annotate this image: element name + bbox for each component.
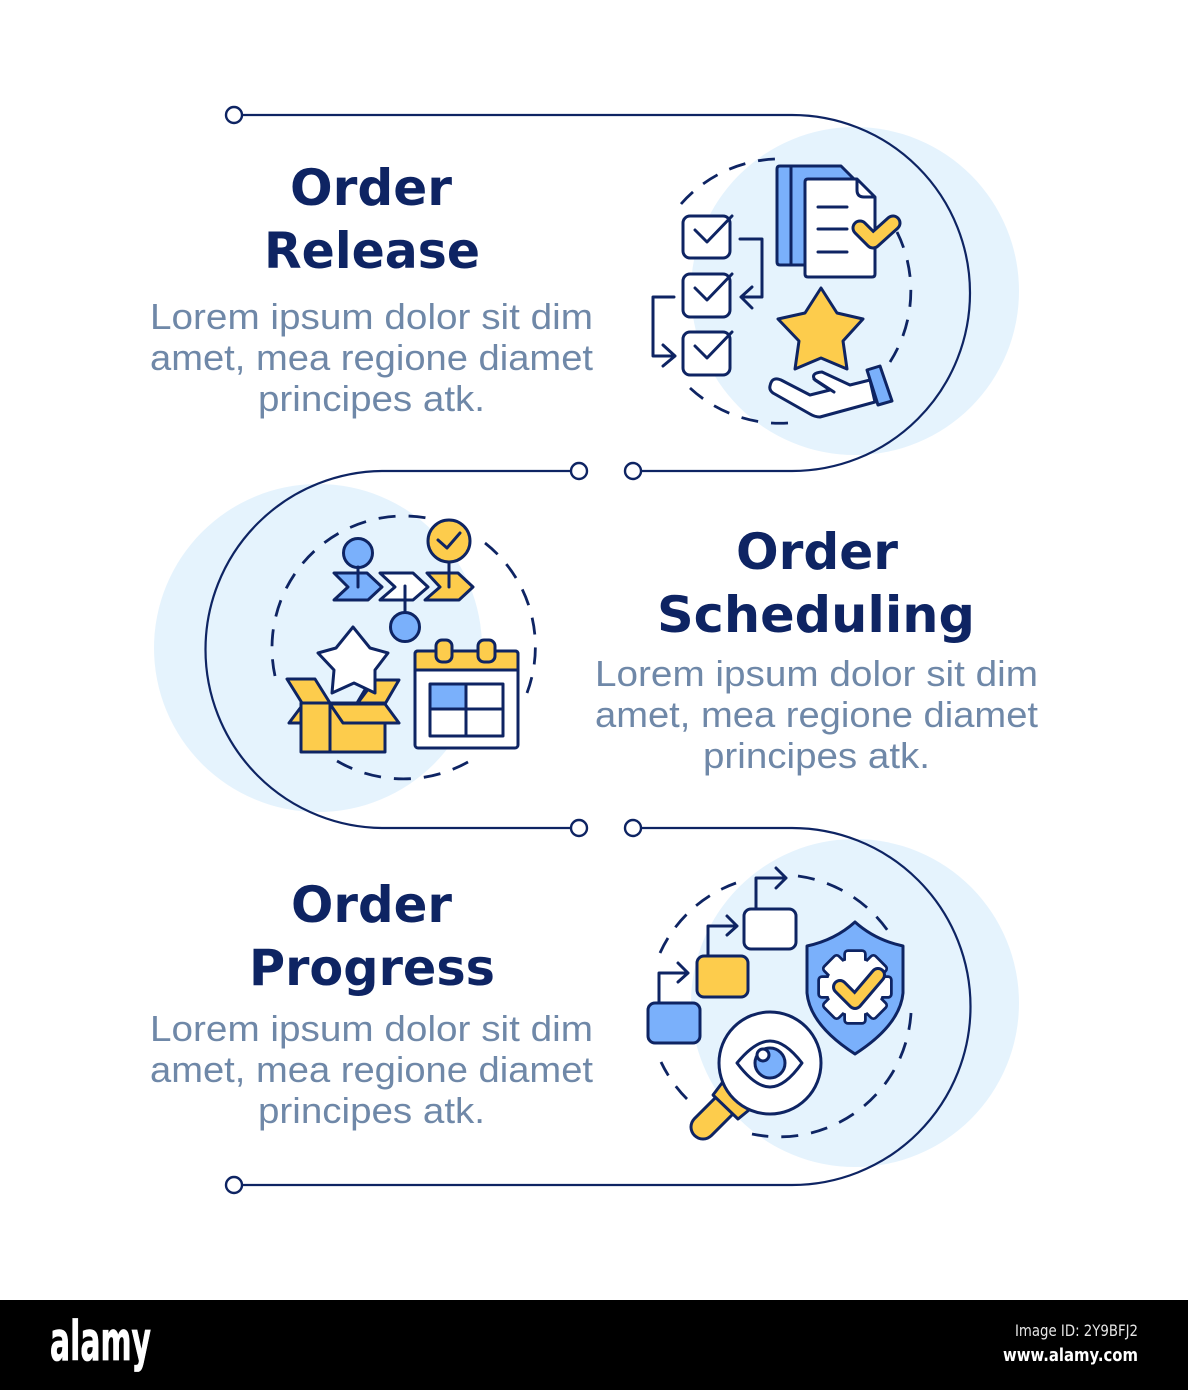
text block: order scheduling: principes atk. bbox=[703, 735, 930, 776]
text block: order release bbox=[150, 296, 593, 419]
icon part: workflow bbox=[334, 520, 473, 642]
heading: order progress: Order bbox=[291, 876, 452, 934]
text block: order progress: amet, mea regione diamet bbox=[150, 1049, 593, 1090]
text block: order scheduling: Lorem ipsum dolor sit dim bbox=[595, 653, 1038, 694]
footer logo: alamy bbox=[50, 1310, 151, 1373]
footer bar bbox=[0, 1300, 1188, 1390]
text block: order progress: principes atk. bbox=[258, 1090, 485, 1131]
icon part: magnifier with eye bbox=[703, 1012, 821, 1127]
text block: order scheduling: amet, mea regione diamet bbox=[595, 694, 1038, 735]
icon part: star bbox=[778, 288, 863, 369]
icon: workflow, gift box and calendar bbox=[272, 516, 535, 779]
icon: documents, checklist, star and hand bbox=[653, 159, 911, 423]
footer website: www.alamy.com bbox=[1003, 1345, 1138, 1366]
icon part: process steps bbox=[648, 868, 796, 1043]
text block: order progress: Lorem ipsum dolor sit dim bbox=[150, 1008, 593, 1049]
heading: order release bbox=[264, 159, 480, 280]
panel: order scheduling bbox=[272, 516, 1038, 779]
icon part: checklist bbox=[653, 216, 762, 375]
text block: order progress bbox=[150, 1008, 593, 1131]
text block: order release: amet, mea regione diamet bbox=[150, 337, 593, 378]
heading: order progress bbox=[249, 876, 495, 997]
heading: order scheduling: Scheduling bbox=[657, 586, 975, 644]
connector line with end dots bbox=[206, 107, 971, 1193]
heading: order scheduling bbox=[657, 523, 975, 644]
icon part: calendar bbox=[415, 640, 518, 748]
panel: order progress bbox=[150, 868, 911, 1137]
heading: order scheduling: Order bbox=[736, 523, 898, 581]
panel: order release bbox=[150, 159, 911, 423]
heading: order release: Order bbox=[290, 159, 452, 217]
text block: order scheduling bbox=[595, 653, 1038, 776]
heading: order progress: Progress bbox=[249, 939, 495, 997]
icon part: hand bbox=[770, 366, 892, 417]
text block: order release: principes atk. bbox=[258, 378, 485, 419]
icon part: shield with gear bbox=[807, 922, 903, 1054]
heading: order release: Release bbox=[264, 222, 480, 280]
icon: process steps, shield and magnifier bbox=[648, 868, 911, 1137]
light blue background circles bbox=[154, 127, 1019, 1167]
footer image id: Image ID: 2Y9BFJ2 bbox=[1015, 1321, 1138, 1340]
icon part: documents bbox=[777, 166, 893, 277]
text block: order release: Lorem ipsum dolor sit dim bbox=[150, 296, 593, 337]
icon part: gift box with star bbox=[287, 627, 399, 752]
